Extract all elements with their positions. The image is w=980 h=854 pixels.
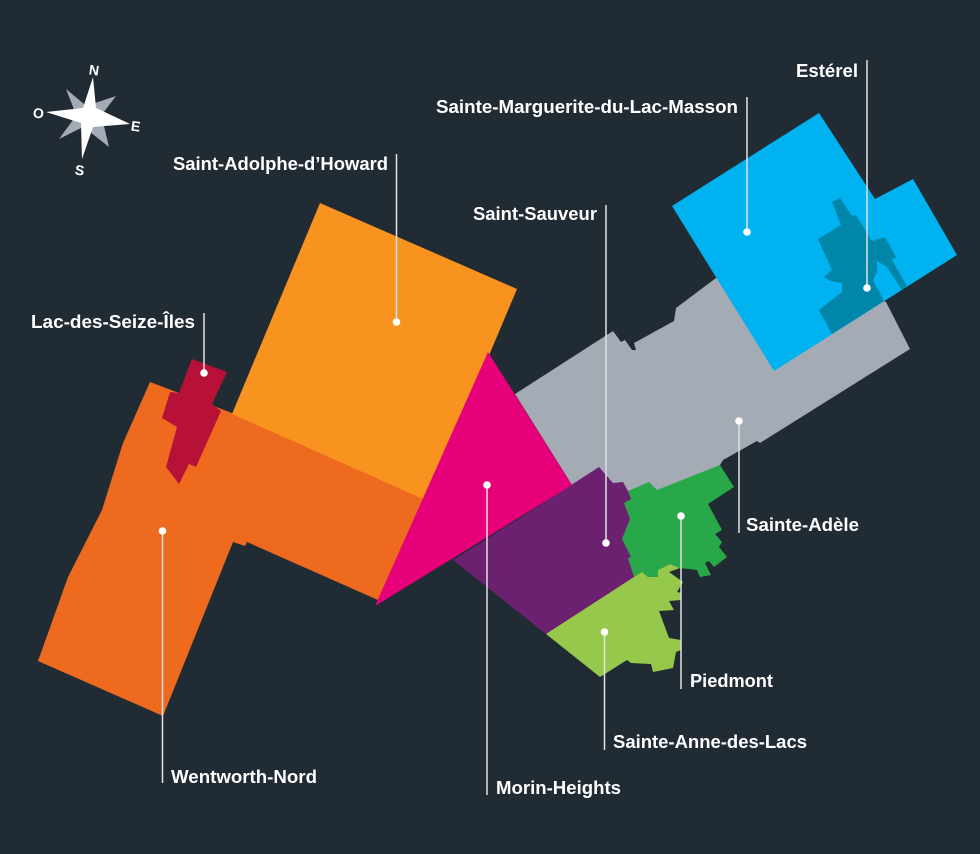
label: Saint-Adolphe-d'Howard [173, 153, 400, 326]
compass letter E: E [130, 118, 141, 135]
label: Lac-des-Seize-Îles [31, 311, 208, 377]
region: Wentworth-Nord [38, 382, 430, 716]
region: Sainte-Marguerite-du-Lac-Masson [672, 113, 957, 371]
compass letter O: O [32, 104, 45, 122]
region: Saint-Adolphe-d'Howard [232, 203, 517, 500]
label: Piedmont [677, 512, 773, 691]
compass diagonal points [59, 89, 116, 147]
region: Sainte-Anne-des-Lacs [546, 564, 683, 677]
compass letter S: S [74, 162, 85, 179]
label: Saint-Adolphe-d'Howard: Saint-Adolphe-d’Howard [173, 153, 388, 174]
label: Sainte-Anne-des-Lacs [601, 628, 807, 752]
label: Morin-Heights: Morin-Heights [496, 777, 621, 798]
region: Estérel [818, 198, 907, 334]
label: Sainte-Adèle [735, 417, 859, 535]
label: Saint-Sauveur [473, 203, 610, 547]
label: Wentworth-Nord: Wentworth-Nord [171, 766, 317, 787]
label: Estérel: Estérel [796, 60, 858, 81]
label: Sainte-Marguerite-du-Lac-Masson [436, 96, 751, 236]
label: Sainte-Anne-des-Lacs: Sainte-Anne-des-Lacs [613, 731, 807, 752]
compass letter N: N [88, 61, 100, 79]
region: Sainte-Adèle [515, 250, 910, 500]
label: Saint-Sauveur: Saint-Sauveur [473, 203, 597, 224]
region: Saint-Sauveur [453, 467, 636, 634]
region: Lac-des-Seize-Îles [162, 359, 227, 484]
region: Morin-Heights [375, 352, 572, 606]
label: Estérel [796, 60, 871, 292]
label: Piedmont: Piedmont [690, 670, 773, 691]
label: Sainte-Adèle: Sainte-Adèle [746, 514, 859, 535]
region: Piedmont [622, 465, 734, 577]
compass main star [46, 77, 130, 159]
label: Morin-Heights [483, 481, 621, 798]
label: Wentworth-Nord [159, 527, 317, 787]
label: Sainte-Marguerite-du-Lac-Masson: Sainte-Marguerite-du-Lac-Masson [436, 96, 738, 117]
compass rose [32, 61, 141, 179]
label: Lac-des-Seize-Îles: Lac-des-Seize-Îles [31, 311, 195, 332]
